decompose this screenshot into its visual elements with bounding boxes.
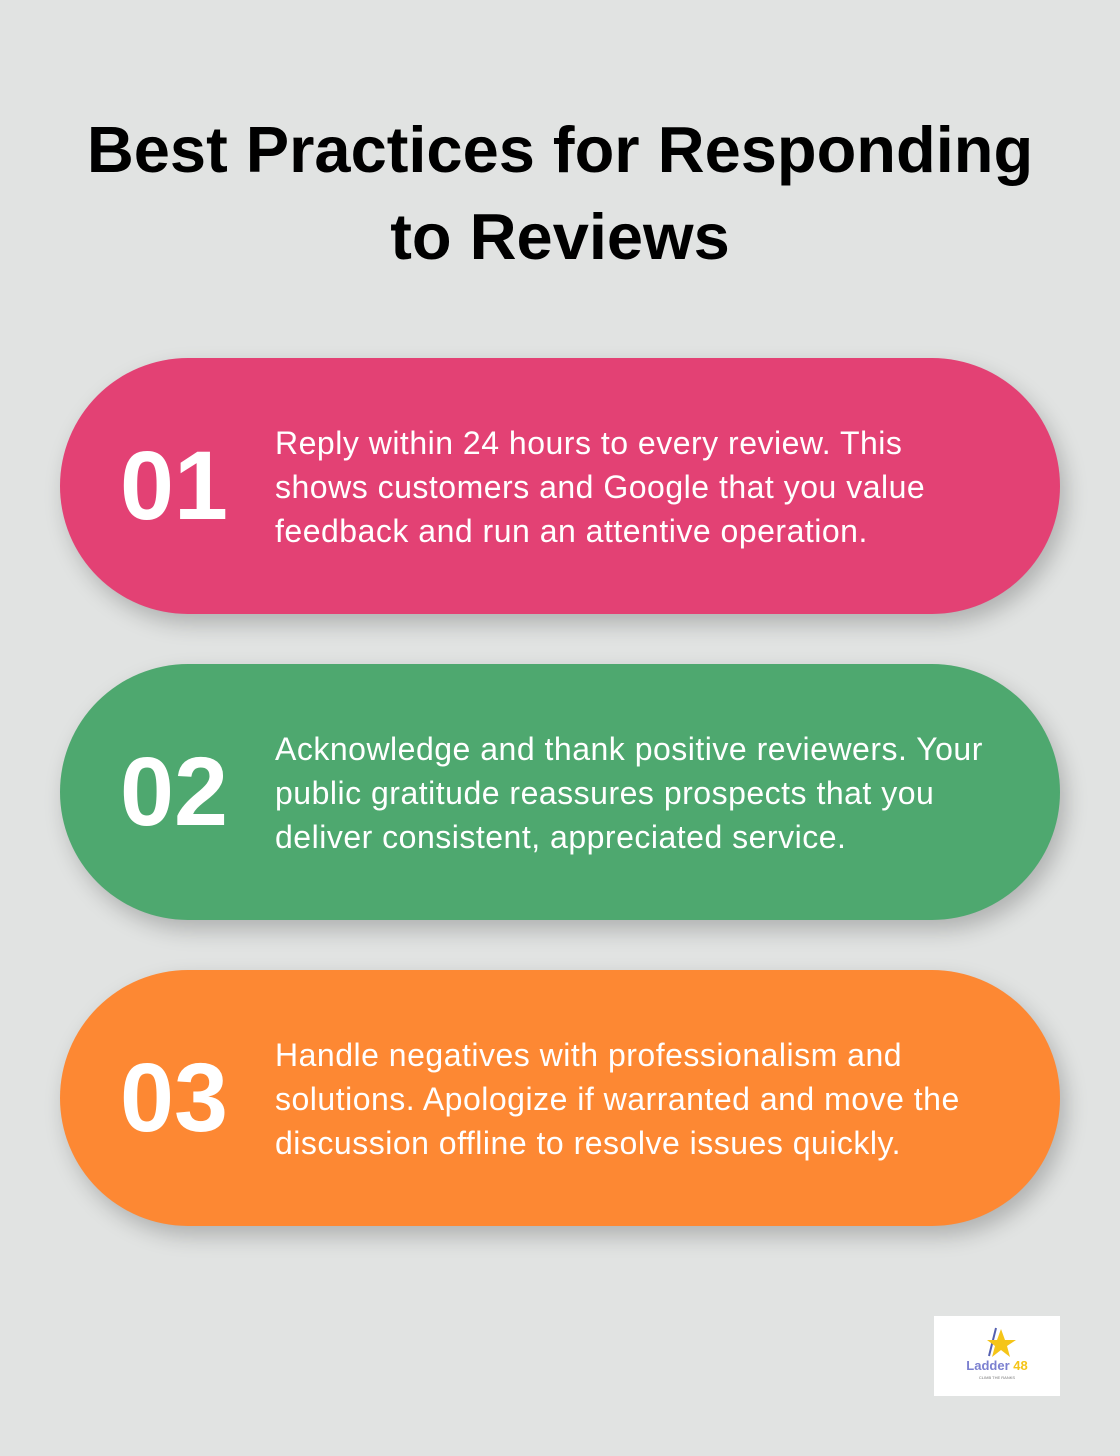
title: to Reviews xyxy=(390,200,730,273)
text 01: Reply within 24 hours to every review. This xyxy=(275,425,902,461)
logo: Ladder 48 xyxy=(966,1358,1028,1373)
text 02: Acknowledge and thank positive reviewers. Your xyxy=(275,731,983,767)
number 02: 02 xyxy=(120,737,228,846)
text 01: feedback and run an attentive operation. xyxy=(275,513,868,549)
text 01 xyxy=(275,425,925,549)
panel: step 01 xyxy=(60,358,1060,614)
text 02 xyxy=(275,731,983,855)
logo: CLIMB THE RANKS xyxy=(979,1375,1015,1380)
text 03 xyxy=(275,1037,960,1161)
text 01: shows customers and Google that you value xyxy=(275,469,925,505)
number 03: 03 xyxy=(120,1043,228,1152)
title: Best Practices for Responding xyxy=(87,113,1033,186)
panel: step 03 xyxy=(60,970,1060,1226)
logo xyxy=(934,1316,1060,1396)
text 03: solutions. Apologize if warranted and move the xyxy=(275,1081,960,1117)
panel: step 02 xyxy=(60,664,1060,920)
title xyxy=(87,113,1033,273)
text 02: public gratitude reassures prospects that you xyxy=(275,775,934,811)
text 03: Handle negatives with professionalism and xyxy=(275,1037,902,1073)
text 02: deliver consistent, appreciated service. xyxy=(275,819,846,855)
number 01: 01 xyxy=(120,431,228,540)
text 03: discussion offline to resolve issues quickly. xyxy=(275,1125,901,1161)
